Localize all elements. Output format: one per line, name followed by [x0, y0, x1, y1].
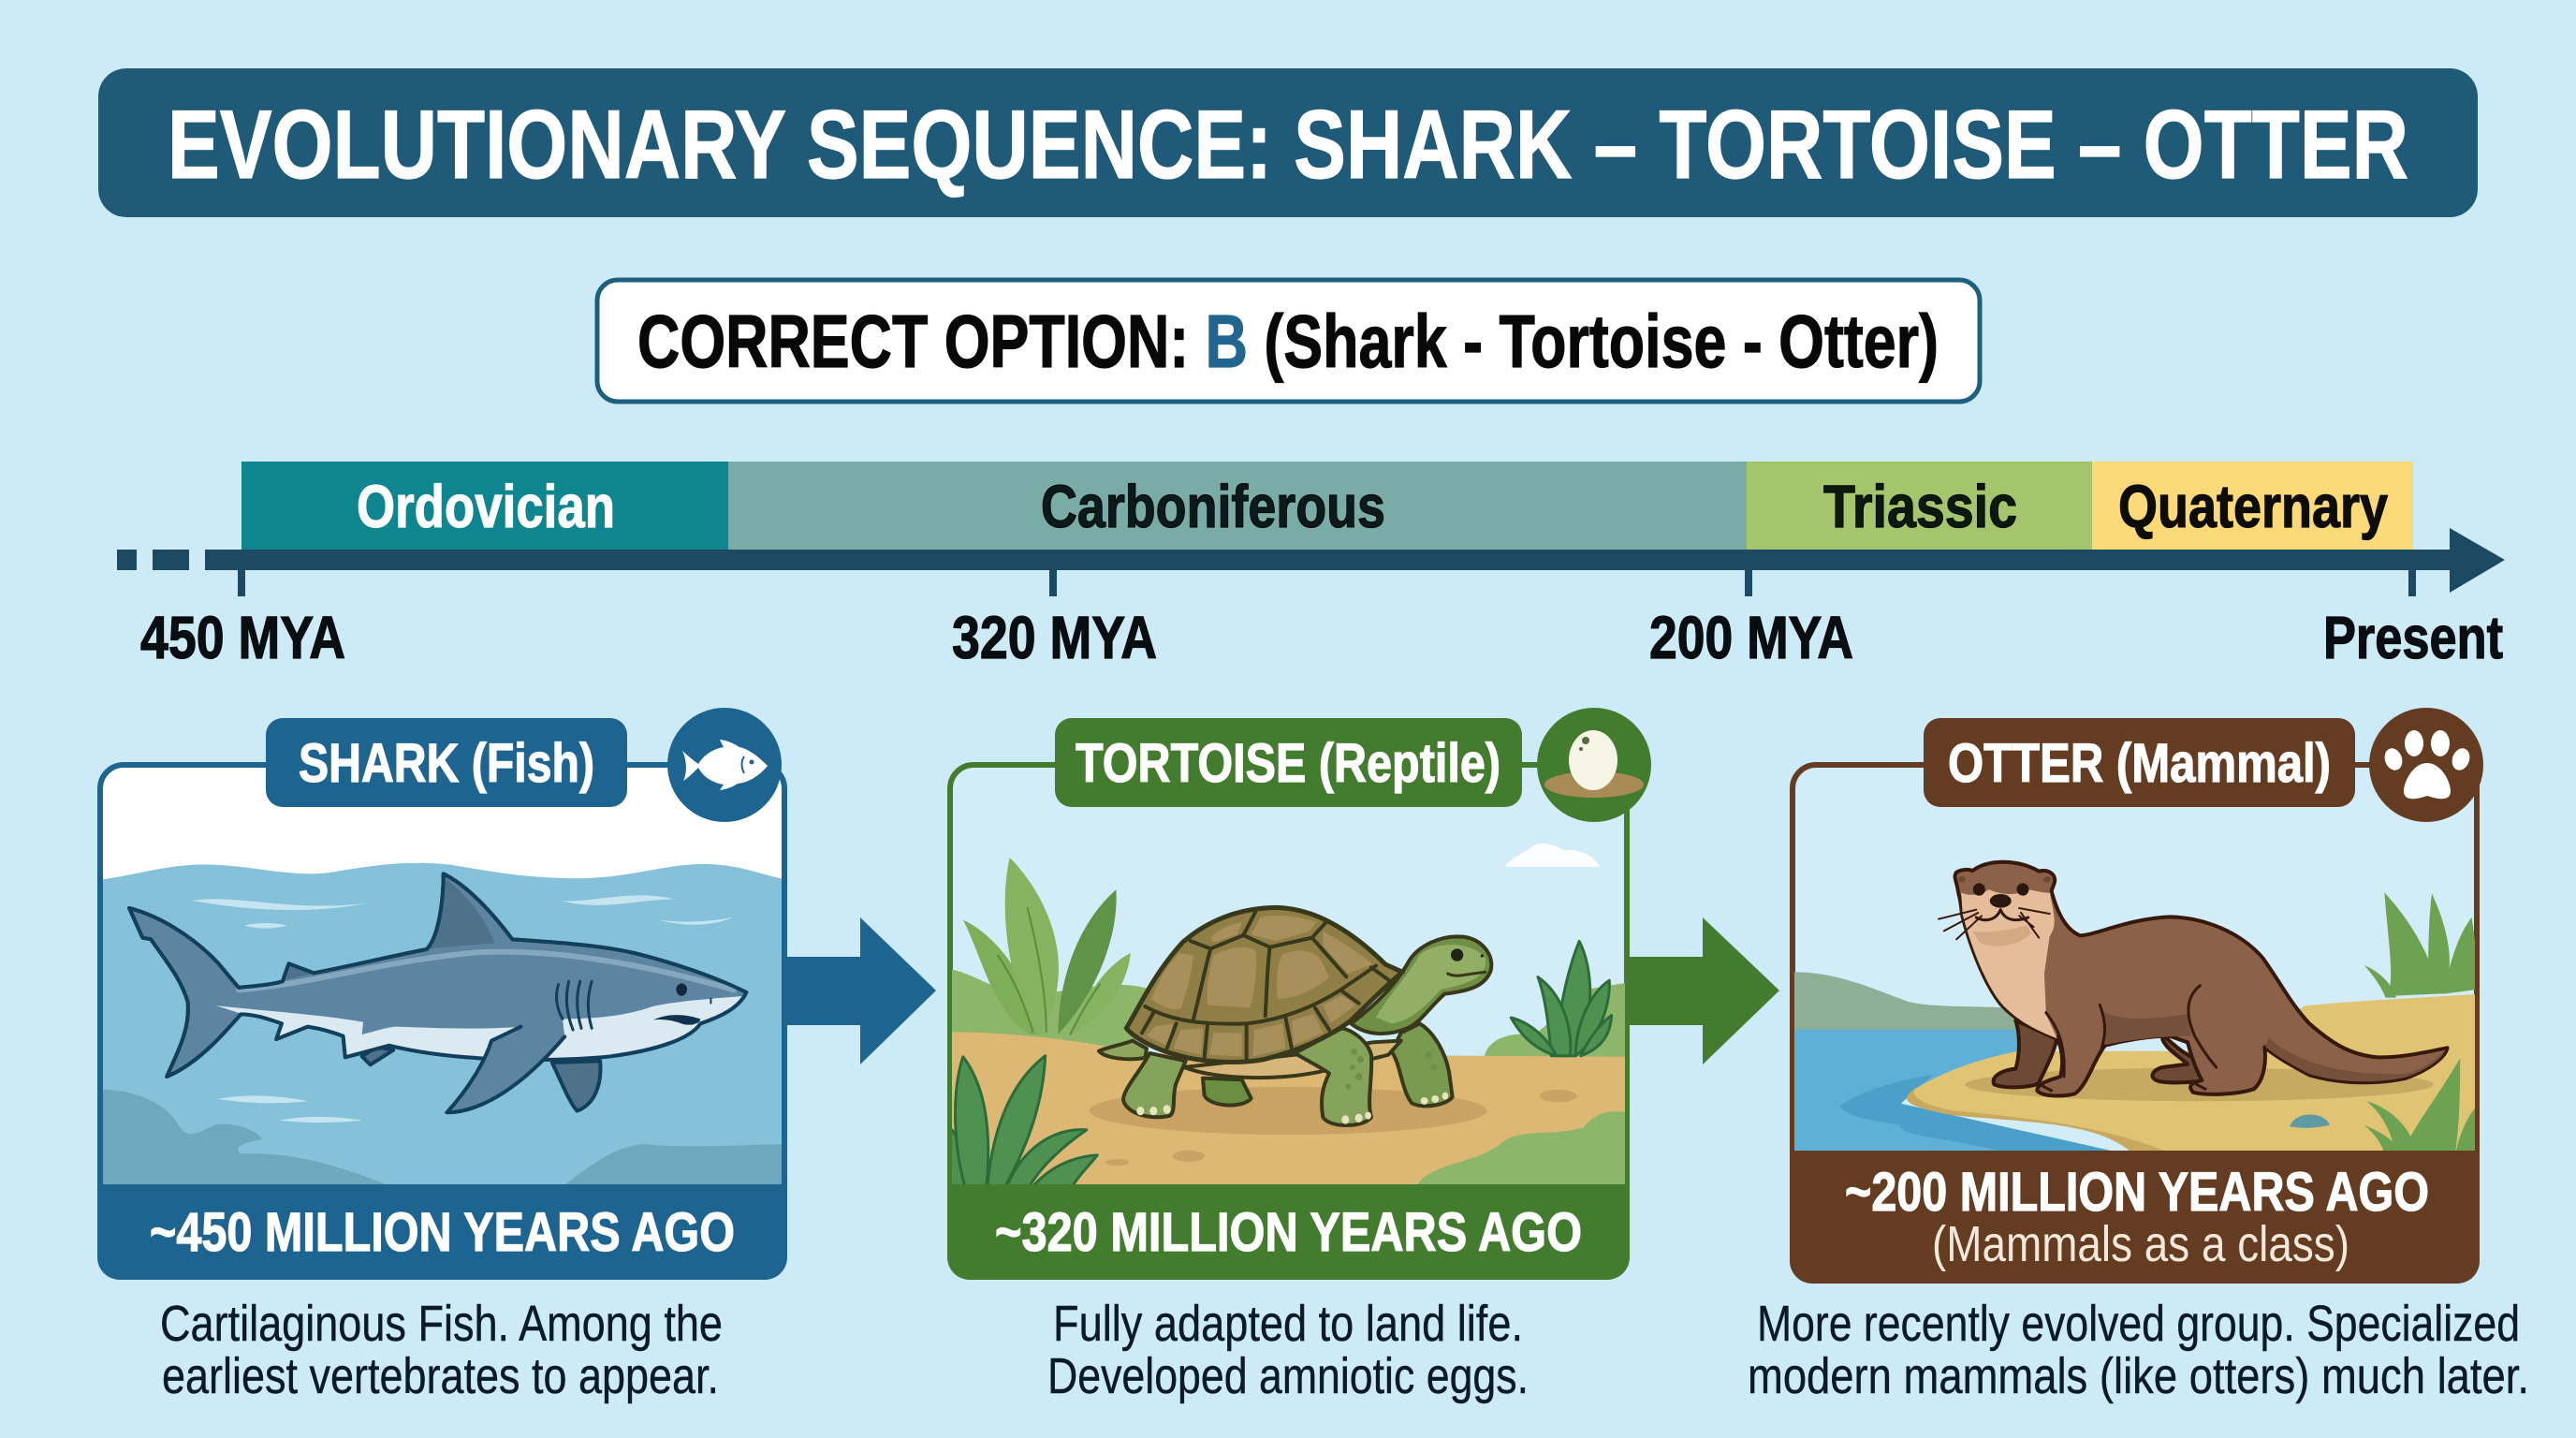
description: tortoise: Developed amniotic eggs. [1047, 1348, 1529, 1404]
title banner [98, 68, 2478, 217]
tick labels: 200 MYA [1649, 604, 1853, 671]
left large plant [963, 858, 1131, 1035]
era: Ordovician [242, 462, 728, 550]
geological timeline [117, 462, 2505, 671]
otter label [1924, 718, 2355, 807]
right plant [1511, 941, 1612, 1056]
tortoise date footer: ~320 MILLION YEARS AGO [995, 1202, 1582, 1263]
era: Triassic [1747, 462, 2092, 550]
tortoise land scene [939, 844, 1632, 1190]
otter date footer: ~200 MILLION YEARS AGO [1845, 1162, 2429, 1223]
description: shark [160, 1296, 723, 1404]
era: Ordovician: Ordovician [357, 473, 615, 540]
icon: egg [1522, 708, 1651, 822]
shark [129, 873, 746, 1112]
tortoise [1099, 907, 1491, 1125]
tortoise card frame [950, 765, 1627, 1277]
correct option box: CORRECT OPTION: B (Shark - Tortoise - Otter) [637, 300, 1939, 383]
era: Carboniferous [728, 462, 1747, 550]
shark card frame [100, 765, 784, 1277]
grass [2364, 892, 2481, 1156]
description: otter [1748, 1296, 2529, 1404]
description: shark: earliest vertebrates to appear. [162, 1348, 719, 1404]
tortoise date footer [947, 1184, 1630, 1280]
icon: paw [2355, 708, 2483, 822]
era: Quaternary: Quaternary [2118, 473, 2388, 540]
tick labels [140, 604, 2503, 671]
panel: shark [96, 708, 789, 1404]
arrow: shark to tortoise [787, 917, 936, 1064]
arrow: tortoise to otter [1630, 917, 1779, 1064]
tick labels: 450 MYA [140, 604, 345, 671]
tortoise label [1055, 718, 1522, 807]
tick labels: 320 MYA [952, 604, 1157, 671]
description: tortoise [1047, 1296, 1529, 1404]
icon: fish [627, 708, 782, 822]
correct option box [597, 280, 1980, 402]
description: shark: Cartilaginous Fish. Among the [160, 1296, 723, 1352]
otter date footer [1790, 1151, 2480, 1284]
panel: otter [1748, 708, 2529, 1404]
shark label [266, 718, 627, 807]
otter [1939, 862, 2447, 1095]
description: tortoise: Fully adapted to land life. [1053, 1296, 1523, 1352]
otter riverbank scene [1789, 862, 2481, 1156]
shark date footer [97, 1184, 787, 1280]
era: Triassic: Triassic [1823, 473, 2017, 540]
timeline arrow [117, 528, 2505, 596]
shark label: SHARK (Fish) [299, 733, 594, 794]
tortoise label: TORTOISE (Reptile) [1076, 733, 1500, 794]
otter date footer: (Mammals as a class) [1932, 1216, 2349, 1272]
era: Quaternary [2092, 462, 2413, 550]
otter card frame [1793, 765, 2477, 1281]
otter label: OTTER (Mammal) [1948, 733, 2331, 794]
panel: tortoise [939, 708, 1651, 1404]
tick labels: Present [2323, 604, 2503, 671]
foreground plant [949, 1056, 1097, 1190]
shark ocean scene [96, 863, 789, 1190]
shark date footer: ~450 MILLION YEARS AGO [150, 1202, 735, 1263]
era: Carboniferous: Carboniferous [1041, 473, 1385, 540]
